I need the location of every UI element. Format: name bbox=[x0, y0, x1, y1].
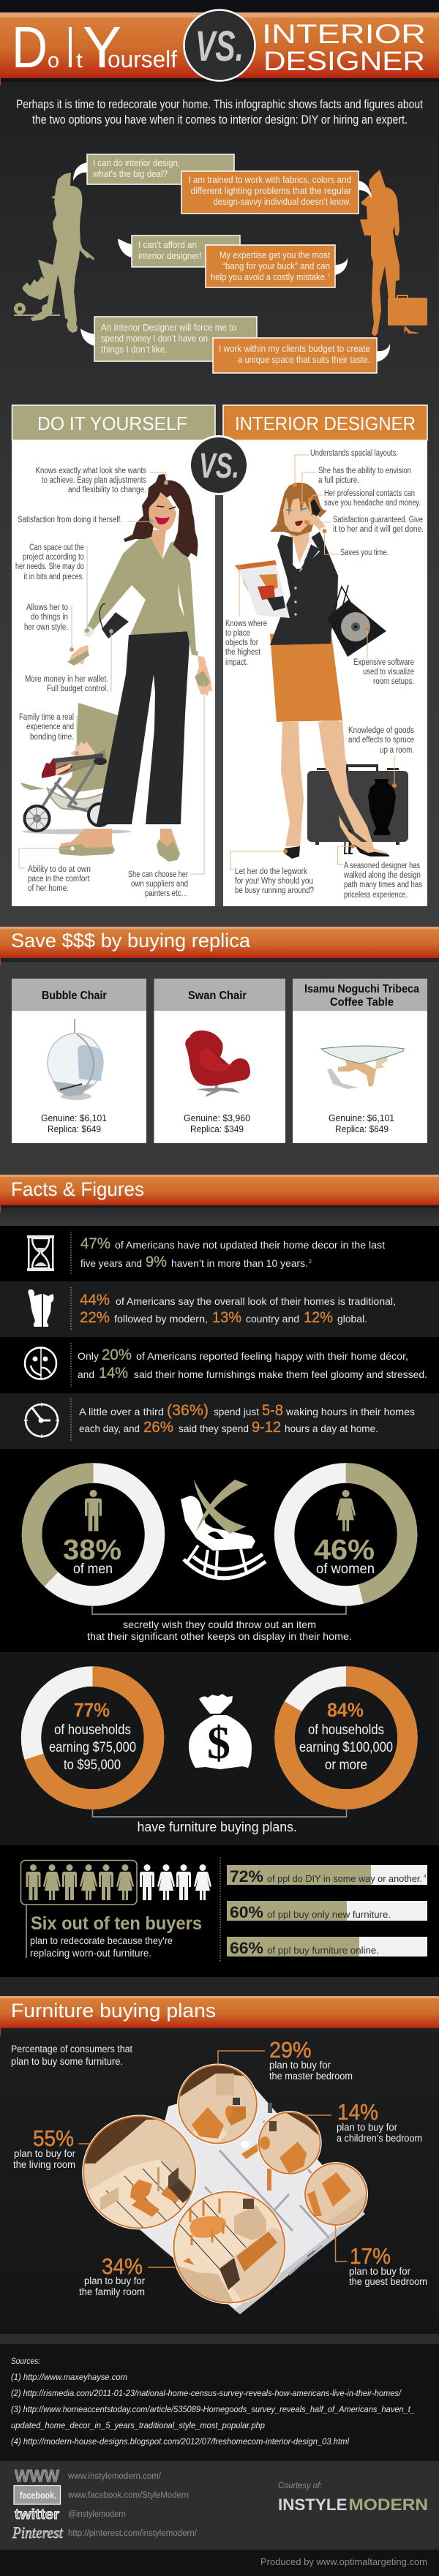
fact row: not updated: 2 bbox=[309, 1259, 312, 1265]
speech bubble: expertise: “bang for your buck” and can bbox=[222, 260, 330, 271]
vs badge: VS. bbox=[195, 23, 244, 70]
callout: 14 percent children's bedroom bbox=[305, 2099, 422, 2144]
caption: throw out bbox=[87, 1619, 352, 1642]
speech bubble: afford: interior designer! bbox=[138, 250, 202, 261]
speech bubble: budget: a unique space that suits their taste. bbox=[238, 354, 370, 365]
callout: 14 percent children's bedroom: plan to buy for bbox=[337, 2122, 397, 2133]
fact row: not updated: haven’t in more than 10 years. bbox=[171, 1257, 308, 1269]
social links: www.facebook.com/StyleModern bbox=[67, 2491, 189, 2500]
callout: 17 percent guest bedroom: plan to buy for bbox=[349, 2266, 410, 2277]
bar: 72 percent bbox=[227, 1865, 427, 1886]
fact row: waking hours: hours a day at home. bbox=[285, 1423, 378, 1434]
bracket bbox=[92, 1809, 347, 1817]
banner: save by buying replica: Save $$$ by buying replica bbox=[11, 930, 251, 952]
banner: furniture buying plans bbox=[0, 1996, 439, 2035]
speech bubble: trained bbox=[181, 171, 372, 214]
fact row: overall look: 13% bbox=[212, 1309, 241, 1326]
fact row: waking hours: A little over a third bbox=[79, 1406, 164, 1417]
text: six out of ten: plan to redecorate because they're bbox=[30, 1935, 173, 1946]
circle: family room bbox=[172, 2191, 289, 2305]
heading: interior designer: INTERIOR DESIGNER bbox=[235, 413, 416, 434]
title banner: I bbox=[66, 15, 75, 80]
title banner: o bbox=[48, 49, 59, 72]
fact row: waking hours: waking hours in their homes bbox=[285, 1406, 415, 1417]
speech bubble: force me: An Interior Designer will force me to bbox=[101, 322, 236, 333]
annotations: do it yourself: her needs. She may do bbox=[15, 562, 84, 571]
callout: 55 percent living room: plan to buy for bbox=[14, 2148, 75, 2159]
bar: 72 percent: 4 bbox=[424, 1875, 427, 1879]
donut: households 100k: of households bbox=[308, 1722, 384, 1738]
fact row: waking hours: spend just bbox=[214, 1406, 259, 1417]
banner: save by buying replica bbox=[0, 927, 439, 965]
bar: 66 percent: of ppl buy furniture online. bbox=[267, 1946, 379, 1956]
speech bubble: expertise bbox=[206, 245, 348, 287]
icon: glass table bbox=[321, 1046, 404, 1089]
text: six out of ten: replacing worn-out furniture. bbox=[30, 1947, 151, 1959]
annotations: do it yourself bbox=[15, 467, 206, 898]
annotations: interior designer: it to her and it will get done. bbox=[333, 525, 424, 534]
annotations: interior designer: room setups. bbox=[373, 677, 414, 686]
annotations: interior designer: A seasoned designer has bbox=[344, 862, 420, 870]
icon row: ten people bbox=[26, 1864, 211, 1900]
social links: @instylemodern bbox=[68, 2510, 126, 2519]
bar: 66 percent: 66% bbox=[230, 1939, 263, 1957]
icon: rocking chair with cross bbox=[181, 1480, 266, 1578]
speech bubble: expertise: help you avoid a costly mistake. bbox=[211, 271, 327, 282]
text: six out of ten bbox=[30, 1913, 202, 1959]
donut: women 46 percent bbox=[285, 1473, 408, 1596]
fact row: not updated: five years and bbox=[80, 1257, 142, 1269]
fact row: overall look: followed by modern, bbox=[114, 1313, 208, 1325]
donut: households 75k: 77% bbox=[74, 1699, 110, 1721]
annotations: interior designer: for you! Why should you bbox=[235, 877, 313, 886]
social links: www.instylemodern.com/ bbox=[67, 2472, 162, 2481]
fact row: happy with decor: and bbox=[78, 1368, 94, 1380]
title banner: DESIGNER bbox=[263, 46, 425, 76]
intro: percentage: Percentage of consumers that bbox=[11, 2044, 132, 2055]
callout: 17 percent guest bedroom: the guest bedroom bbox=[349, 2276, 427, 2287]
fact row: happy with decor: 20% bbox=[102, 1347, 132, 1363]
caption: plans: have furniture buying plans. bbox=[138, 1820, 297, 1834]
fact row: not updated: of Americans have not updated their home decor in the last bbox=[115, 1239, 385, 1251]
annotations: interior designer: walked along the design bbox=[343, 871, 421, 880]
card: swan chair: Genuine: $3,960 bbox=[184, 1112, 250, 1123]
card: noguchi table: Replica: $649 bbox=[335, 1123, 389, 1134]
card: bubble chair: Genuine: $6,101 bbox=[41, 1112, 107, 1123]
annotations: do it yourself: pace in the comfort bbox=[28, 875, 90, 884]
illustration: designer woman bbox=[235, 483, 388, 859]
card: bubble chair: Replica: $649 bbox=[48, 1123, 101, 1134]
card: noguchi table: Coffee Table bbox=[330, 996, 394, 1009]
speech bubble: budget: I work within my clients budget to create bbox=[219, 343, 370, 354]
annotations: do it yourself: her own style. bbox=[24, 623, 68, 632]
callout: 55 percent living room: 55% bbox=[33, 2125, 74, 2151]
vs badge middle bbox=[189, 435, 249, 495]
donut: households 75k: of households bbox=[54, 1722, 131, 1738]
annotations: interior designer: path many times and has bbox=[344, 881, 422, 889]
sources list bbox=[11, 2357, 415, 2447]
donut: households 100k: or more bbox=[325, 1758, 367, 1773]
callout: 34 percent family room: plan to buy for bbox=[84, 2275, 145, 2286]
banner: facts and figures bbox=[0, 1175, 439, 1213]
speech bubble: trained: I am trained to work with fabrics, colors and bbox=[189, 174, 351, 185]
icon: money bag: $ bbox=[207, 1717, 230, 1769]
vs badge bbox=[184, 10, 255, 80]
fact row: happy with decor: said their home furnishings make them feel gloomy and stressed. bbox=[134, 1368, 427, 1380]
callout: 29 percent master bedroom: plan to buy for bbox=[269, 2060, 331, 2071]
social links bbox=[67, 2472, 198, 2538]
section: six out of ten and bars bbox=[0, 1845, 439, 1977]
logo: pinterest: Pinterest bbox=[12, 2523, 64, 2542]
bar: 66 percent bbox=[227, 1937, 427, 1957]
title banner: ourself bbox=[108, 46, 177, 72]
speech bubble: trained: design-savvy individual doesn’t know. bbox=[214, 196, 351, 207]
annotations: interior designer: used to visualize bbox=[363, 668, 414, 677]
speech bubble: can do bbox=[73, 154, 234, 184]
fact row: not updated: 9% bbox=[146, 1254, 167, 1270]
sources list: Sources: bbox=[11, 2357, 40, 2366]
title banner: INTERIOR bbox=[262, 19, 426, 49]
annotations: interior designer: be busy running around? bbox=[235, 886, 314, 895]
circle: master bedroom bbox=[176, 2063, 260, 2148]
annotations: do it yourself: More money in her wallet. bbox=[25, 675, 108, 684]
card: bubble chair bbox=[12, 979, 146, 1143]
icon: clock bbox=[24, 1403, 59, 1438]
logo: facebook: facebook. bbox=[20, 2490, 56, 2501]
annotations: interior designer: Let her do the legwork bbox=[235, 867, 307, 876]
annotations: do it yourself: of her home. bbox=[28, 884, 69, 893]
illustration: diy woman bbox=[59, 474, 212, 862]
fact row: overall look: global. bbox=[337, 1313, 367, 1325]
annotations: do it yourself: do things in bbox=[31, 613, 68, 622]
fact row: overall look: of Americans say the overall look of their homes is traditional, bbox=[116, 1295, 396, 1307]
icon: hourglass bbox=[27, 1235, 54, 1271]
panel: comparison backdrop bbox=[12, 440, 427, 906]
speech bubble: force me bbox=[80, 317, 257, 361]
donut: households 75k: to $95,000 bbox=[64, 1758, 121, 1773]
bracket bbox=[92, 1606, 346, 1614]
annotations: do it yourself: it in bits and pieces. bbox=[23, 573, 84, 581]
annotations: interior designer bbox=[225, 449, 424, 900]
donut: men 38 percent: of men bbox=[73, 1562, 113, 1577]
card: noguchi table: Genuine: $6,101 bbox=[329, 1112, 394, 1123]
card: swan chair: Swan Chair bbox=[188, 990, 247, 1002]
donut: men 38 percent: 38% bbox=[63, 1534, 121, 1566]
annotations: do it yourself: Allows her to bbox=[26, 603, 68, 612]
illustration: stroller bbox=[20, 703, 132, 834]
annotations: interior designer: Knowledge of goods bbox=[348, 726, 414, 735]
donut: households 100k: 84% bbox=[327, 1699, 364, 1721]
speech bubble: trained: different lighting problems that the regular bbox=[190, 185, 352, 196]
intro: percentage: plan to buy some furniture. bbox=[11, 2056, 123, 2067]
intro: percentage bbox=[11, 2044, 132, 2067]
banner: facts and figures: Facts & Figures bbox=[11, 1178, 144, 1200]
speech bubble: budget bbox=[213, 338, 390, 373]
fact row: not updated bbox=[0, 1226, 439, 1281]
text: six out of ten: Six out of ten buyers bbox=[31, 1913, 202, 1934]
donut: households 75k: earning $75,000 bbox=[49, 1740, 136, 1755]
bar: 72 percent: 72% bbox=[230, 1867, 263, 1886]
card: noguchi table bbox=[293, 979, 427, 1143]
annotations: do it yourself: She can choose her bbox=[128, 870, 188, 879]
icon: money bag bbox=[189, 1694, 252, 1769]
donut: men 38 percent bbox=[7, 1447, 180, 1622]
annotations: do it yourself: bonding time. bbox=[30, 733, 74, 742]
annotations: do it yourself: Full budget control. bbox=[47, 685, 108, 693]
illustration: briefcase and vase bbox=[307, 720, 408, 856]
donut: households 100k: earning $100,000 bbox=[299, 1740, 393, 1755]
callout: 14 percent children's bedroom: 14% bbox=[337, 2099, 378, 2125]
logo: twitter: twitter bbox=[15, 2507, 60, 2523]
annotations: do it yourself: project according to bbox=[23, 553, 84, 562]
donut: women 46 percent: of women bbox=[316, 1562, 375, 1577]
annotations: interior designer: Understands spacial layouts. bbox=[310, 449, 398, 458]
fact row: happy with decor: Only bbox=[78, 1350, 99, 1362]
annotations: do it yourself: to achieve. Easy plan adjustments bbox=[42, 476, 146, 485]
callout: 14 percent children's bedroom: a children’s bedroom bbox=[337, 2133, 422, 2144]
annotations: interior designer: to place bbox=[225, 629, 250, 638]
speech bubble: force me: spend money I don’t have on bbox=[101, 333, 208, 344]
annotations: interior designer: and effects to spruce bbox=[348, 736, 414, 745]
card: bubble chair: Bubble Chair bbox=[42, 990, 107, 1002]
bar: 60 percent bbox=[227, 1901, 427, 1921]
fact row: overall look: 44% bbox=[80, 1292, 110, 1308]
fact row: waking hours: (36%) bbox=[167, 1402, 209, 1419]
annotations: do it yourself: painters etc… bbox=[145, 889, 188, 898]
silhouette: diy woman with stroller bbox=[14, 173, 94, 333]
title banner: Y bbox=[83, 15, 121, 80]
annotations: interior designer: Her professional contacts can bbox=[324, 489, 415, 498]
sources list: updated_home_decor_in_5_years_traditional_style_most_popular.php bbox=[11, 2422, 266, 2430]
bar: 72 percent: of ppl do DIY in some way or another. bbox=[267, 1874, 422, 1884]
icon: bubble chair bbox=[48, 1019, 103, 1100]
callout: 17 percent guest bedroom bbox=[335, 2226, 427, 2287]
courtesy logo: Courtesy of: bbox=[278, 2482, 322, 2490]
callout: 34 percent family room bbox=[79, 2253, 175, 2297]
title banner: D bbox=[12, 15, 48, 80]
logo: facebook bbox=[14, 2485, 60, 2504]
speech bubble: afford bbox=[118, 236, 240, 267]
annotations: interior designer: She has the ability to envision bbox=[318, 467, 411, 475]
fact row: overall look bbox=[0, 1281, 439, 1337]
caption: throw out: secretly wish they could throw out an item bbox=[123, 1619, 316, 1630]
annotations: interior designer: objects for bbox=[225, 639, 258, 647]
donut: households 100k bbox=[285, 1676, 408, 1799]
speech bubble: force me: things I don’t like. bbox=[101, 344, 167, 355]
courtesy logo: MODERN bbox=[348, 2496, 428, 2514]
annotations: interior designer: the highest bbox=[225, 648, 261, 657]
heading: interior designer bbox=[223, 405, 427, 440]
callout: 34 percent family room: the family room bbox=[79, 2286, 145, 2297]
speech bubble: expertise: 1 bbox=[328, 274, 331, 278]
callout: 29 percent master bedroom: the master bedroom bbox=[269, 2071, 353, 2082]
speech bubble: afford: I can’t afford an bbox=[138, 239, 197, 250]
section: furniture buying plans by income bbox=[0, 1652, 439, 1845]
section: throw out an item bbox=[0, 1447, 439, 1652]
silhouette: designer with briefcase bbox=[360, 170, 427, 336]
callout: 29 percent master bedroom bbox=[218, 2037, 353, 2082]
fact row: happy with decor bbox=[0, 1337, 439, 1393]
annotations: do it yourself: and flexibility to change. bbox=[68, 486, 146, 494]
annotations: do it yourself: Ability to do at own bbox=[28, 865, 91, 874]
annotations: interior designer: Knows where bbox=[225, 619, 267, 628]
annotations: do it yourself: experience and bbox=[26, 723, 74, 731]
producer credit: Produced by www.optimaltargeting.com bbox=[260, 2556, 427, 2567]
illustration: house floor plan bbox=[138, 2081, 365, 2314]
sources list: (2) http://rismedia.com/2011-01-23/national-home-census-survey-reveals-how-americans-live-in-their-homes/ bbox=[11, 2389, 402, 2398]
fact row: waking hours bbox=[0, 1393, 439, 1449]
callout: 55 percent living room: the living room bbox=[13, 2159, 75, 2170]
fact row: not updated: 47% bbox=[80, 1235, 110, 1252]
footer panel bbox=[0, 2461, 439, 2550]
title banner bbox=[0, 10, 439, 86]
circle: living room bbox=[80, 2114, 198, 2234]
courtesy logo bbox=[278, 2482, 428, 2514]
annotations: do it yourself: Family time a real bbox=[19, 713, 74, 722]
annotations: do it yourself: Can space out the bbox=[29, 543, 84, 552]
sources list: (3) http://www.homeaccentstoday.com/article/535089-Homegoods_survey_reveals_half_of_Americans_haven_t_ bbox=[11, 2406, 415, 2414]
fact row: waking hours: said they spend bbox=[179, 1423, 249, 1434]
bar: 60 percent: of ppl buy only new furniture. bbox=[267, 1910, 391, 1920]
fact row: waking hours: 26% bbox=[143, 1419, 173, 1436]
speech bubble: can do: I can do interior design, bbox=[93, 157, 180, 168]
donut: women 46 percent: 46% bbox=[314, 1534, 375, 1566]
fact row: waking hours: 5-8 bbox=[262, 1402, 283, 1419]
speech bubble: expertise: My expertise get you the most bbox=[220, 249, 330, 260]
annotations: do it yourself: Knows exactly what look she wants bbox=[35, 467, 146, 475]
circle: children's bedroom bbox=[256, 2110, 323, 2177]
callout: 55 percent living room bbox=[13, 2125, 91, 2170]
annotations: do it yourself: Satisfaction from doing it herself. bbox=[18, 516, 122, 524]
circle: guest bedroom bbox=[304, 2161, 368, 2231]
icon: vase bbox=[28, 1289, 53, 1327]
fact row: waking hours: 9-12 bbox=[252, 1419, 281, 1436]
caption: throw out: that their significant other keeps on display in their home. bbox=[87, 1630, 352, 1642]
callout: 29 percent master bedroom: 29% bbox=[269, 2037, 312, 2063]
icon: swan chair bbox=[185, 1031, 250, 1097]
sources list: (1) http://www.maxeyhayse.com bbox=[11, 2373, 127, 2382]
bar: 60 percent: 60% bbox=[230, 1903, 263, 1921]
donut: households 75k bbox=[31, 1676, 154, 1799]
card: noguchi table: Isamu Noguchi Tribeca bbox=[304, 983, 419, 995]
annotations: interior designer: Saves you time. bbox=[340, 549, 389, 557]
fact row: overall look: 12% bbox=[304, 1309, 333, 1326]
annotations: do it yourself: own suppliers and bbox=[131, 880, 188, 889]
banner: furniture buying plans: Furniture buying plans bbox=[11, 2000, 216, 2022]
vs badge middle: VS. bbox=[199, 447, 239, 486]
speech bubble: can do: what’s the big deal? bbox=[92, 168, 168, 179]
fact row: overall look: country and bbox=[246, 1313, 299, 1325]
annotations: interior designer: up a room. bbox=[380, 746, 414, 755]
courtesy logo: INSTYLE bbox=[278, 2496, 347, 2514]
icon: mask face bbox=[25, 1347, 56, 1379]
annotations: interior designer: impact. bbox=[225, 658, 248, 667]
fact row: overall look: 22% bbox=[80, 1309, 110, 1326]
fact row: waking hours: each day, and bbox=[79, 1423, 140, 1434]
title banner: t bbox=[76, 49, 83, 72]
callout: 17 percent guest bedroom: 17% bbox=[350, 2243, 391, 2269]
heading: do it yourself bbox=[12, 405, 215, 440]
heading: do it yourself: DO IT YOURSELF bbox=[37, 413, 187, 434]
social links: http://pinterest.com/instylemodern/ bbox=[68, 2529, 198, 2538]
card: swan chair bbox=[154, 979, 285, 1143]
card: swan chair: Replica: $349 bbox=[190, 1123, 244, 1134]
annotations: interior designer: a full picture. bbox=[318, 476, 359, 485]
sources list: (4) http://modern-house-designs.blogspot.com/2012/07/freshomecom-interior-design_03.html bbox=[11, 2438, 349, 2447]
annotations: interior designer: Expensive software bbox=[353, 658, 414, 667]
callout: 34 percent family room: 34% bbox=[102, 2253, 143, 2279]
annotations: interior designer: priceless experience. bbox=[344, 891, 408, 900]
fact row: happy with decor: 14% bbox=[99, 1365, 128, 1382]
fact row: happy with decor: of Americans reported feeling happy with their home décor, bbox=[136, 1350, 408, 1362]
logo: www: WWW bbox=[15, 2466, 59, 2485]
intro text bbox=[16, 97, 423, 127]
